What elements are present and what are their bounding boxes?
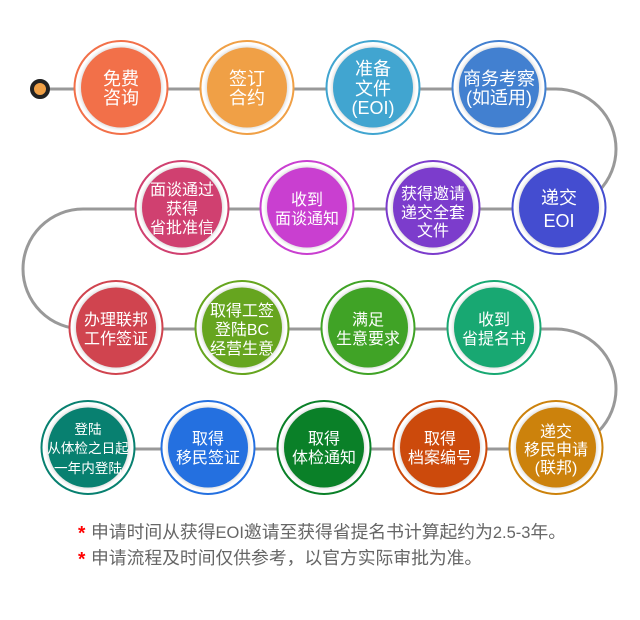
step: 签订合约: 签订 xyxy=(229,69,265,89)
step: 取得工签登陆BC经营生意 xyxy=(196,281,288,374)
step: 面谈通过获得省批准信: 面谈通过 xyxy=(150,181,214,199)
step: 满足生意要求: 满足 xyxy=(352,311,384,329)
step: 登陆从体检之日起一年内登陆: 一年内登陆 xyxy=(54,461,122,476)
step: 收到省提名书: 收到 xyxy=(478,311,510,329)
step: 登陆从体检之日起一年内登陆: 从体检之日起 xyxy=(47,441,129,456)
step: 免费咨询: 咨询 xyxy=(103,88,139,108)
footnotes xyxy=(78,522,566,570)
step: 递交EOI: EOI xyxy=(543,211,575,231)
step: 获得邀请递交全套文件 xyxy=(386,161,480,254)
step: 办理联邦工作签证: 工作签证 xyxy=(84,330,148,348)
step: 登陆从体检之日起一年内登陆: 登陆 xyxy=(74,422,102,437)
step: 取得体检通知 xyxy=(278,401,370,494)
step: 办理联邦工作签证: 办理联邦 xyxy=(84,311,148,329)
note 1: 申请时间从获得EOI邀请至获得省提名书计算起约为2.5-3年。 xyxy=(91,522,566,542)
step: 满足生意要求: 生意要求 xyxy=(336,329,400,348)
step: 获得邀请递交全套文件: 递交全套 xyxy=(401,204,465,222)
step: 取得移民签证 xyxy=(162,401,254,494)
step: 收到面谈通知: 面谈通知 xyxy=(275,210,339,228)
step: 递交移民申请(联邦): (联邦) xyxy=(535,459,577,477)
step: 取得移民签证: 移民签证 xyxy=(176,449,240,467)
step: 收到面谈通知 xyxy=(260,161,354,254)
step: 获得邀请递交全套文件: 文件 xyxy=(417,222,449,240)
step: 收到省提名书: 省提名书 xyxy=(462,330,526,348)
step: 准备文件(EOI): (EOI) xyxy=(352,98,394,118)
start marker xyxy=(32,81,48,97)
step: 收到省提名书 xyxy=(448,281,540,374)
step: 递交移民申请(联邦): 移民申请 xyxy=(524,441,588,459)
step: 获得邀请递交全套文件: 获得邀请 xyxy=(401,185,465,203)
step: 准备文件(EOI): 准备 xyxy=(355,59,391,79)
step: 递交移民申请(联邦): 递交 xyxy=(540,423,572,441)
step: 取得工签登陆BC经营生意: 登陆BC xyxy=(215,321,269,339)
step: 准备文件(EOI) xyxy=(326,41,420,134)
connector path xyxy=(23,89,616,449)
step: 取得档案编号 xyxy=(394,401,486,494)
step: 面谈通过获得省批准信 xyxy=(136,161,228,254)
step: 收到面谈通知: 收到 xyxy=(291,191,323,209)
step: 递交移民申请(联邦) xyxy=(510,401,602,494)
step: 取得体检通知: 取得 xyxy=(308,430,340,448)
step: 准备文件(EOI): 文件 xyxy=(355,79,391,99)
step: 登陆从体检之日起一年内登陆 xyxy=(42,401,134,494)
note 2: * xyxy=(78,550,86,570)
step: 面谈通过获得省批准信: 获得 xyxy=(166,200,198,218)
step: 取得工签登陆BC经营生意: 取得工签 xyxy=(210,302,274,320)
step: 签订合约 xyxy=(200,41,294,134)
step: 商务考察(如适用): (如适用) xyxy=(466,88,532,108)
step: 面谈通过获得省批准信: 省批准信 xyxy=(150,219,214,237)
step: 商务考察(如适用) xyxy=(452,41,546,134)
step: 免费咨询: 免费 xyxy=(103,69,139,89)
step: 递交EOI: 递交 xyxy=(541,188,577,208)
step: 递交EOI xyxy=(512,161,606,254)
step: 满足生意要求 xyxy=(322,281,414,374)
step: 取得档案编号: 档案编号 xyxy=(408,449,472,467)
step: 取得工签登陆BC经营生意: 经营生意 xyxy=(210,339,274,358)
step: 签订合约: 合约 xyxy=(229,88,265,108)
step: 取得档案编号: 取得 xyxy=(424,430,456,448)
step: 取得体检通知: 体检通知 xyxy=(292,449,356,467)
step: 免费咨询 xyxy=(74,41,168,134)
note 2: 申请流程及时间仅供参考，以官方实际审批为准。 xyxy=(91,548,482,568)
step: 办理联邦工作签证 xyxy=(70,281,162,374)
step: 取得移民签证: 取得 xyxy=(192,430,224,448)
note 1: * xyxy=(78,524,86,544)
step: 商务考察(如适用): 商务考察 xyxy=(463,69,535,89)
